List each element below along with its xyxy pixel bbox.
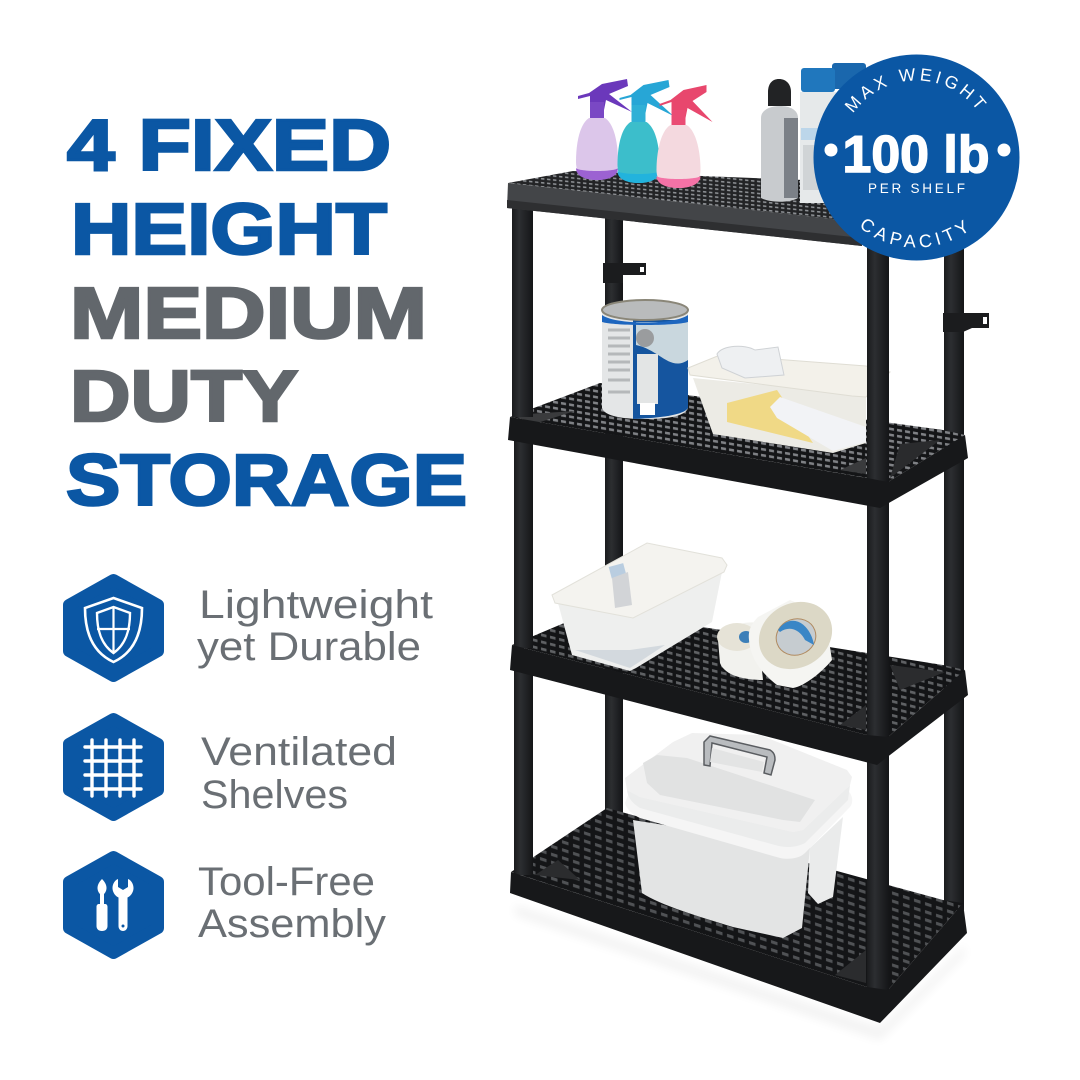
label: lightweight yet durable: Lightweight (199, 583, 433, 627)
label: lightweight yet durable: yet Durable (197, 625, 421, 669)
label: tool-free assembly: Tool-Free (198, 860, 375, 904)
spray bottle: pink (656, 85, 712, 188)
caddy (625, 733, 852, 938)
title (66, 106, 467, 521)
badge dot right (998, 144, 1010, 156)
label: ventilated shelves: Ventilated (201, 730, 397, 774)
label: tool-free assembly (198, 860, 386, 946)
badge text: capacity arc: CAPACITY (862, 219, 966, 248)
badge text: max weight arc: MAX WEIGHT (844, 68, 987, 112)
wall brackets (603, 263, 989, 332)
badge number: 100 lb: 100 lb (842, 126, 990, 184)
icon: tools (69, 857, 158, 953)
title: HEIGHT (71, 190, 387, 270)
icon: shield (69, 580, 158, 676)
badge text: per shelf: PER SHELF (868, 181, 965, 196)
spray bottle: purple (576, 79, 632, 180)
shelving unit (507, 63, 989, 1040)
label: ventilated shelves (201, 730, 397, 817)
badge dot left (824, 144, 838, 156)
spray bottle: cyan (618, 80, 674, 183)
label: ventilated shelves: Shelves (201, 773, 348, 817)
shelf surfaces (508, 171, 965, 990)
clear storage box (552, 543, 727, 671)
title: MEDIUM (70, 274, 427, 354)
back posts (605, 215, 964, 910)
feature: tool-free assembly (69, 857, 386, 953)
tape rolls (717, 589, 844, 688)
title: STORAGE (66, 441, 467, 521)
label: tool-free assembly: Assembly (198, 902, 386, 946)
shelf front edges (507, 183, 968, 1023)
feature: ventilated shelves (69, 719, 397, 817)
badge: max weight (814, 54, 1020, 260)
feature: lightweight yet durable (69, 580, 433, 676)
front posts (512, 205, 889, 990)
paint can (602, 300, 688, 419)
aerosol cans (761, 63, 866, 203)
title: 4 FIXED (67, 106, 391, 186)
title: DUTY (70, 357, 298, 437)
icon: grid (69, 719, 158, 815)
plastic storage box with towels (688, 346, 890, 453)
label: lightweight yet durable (197, 583, 433, 669)
floor shadow (515, 905, 965, 1040)
